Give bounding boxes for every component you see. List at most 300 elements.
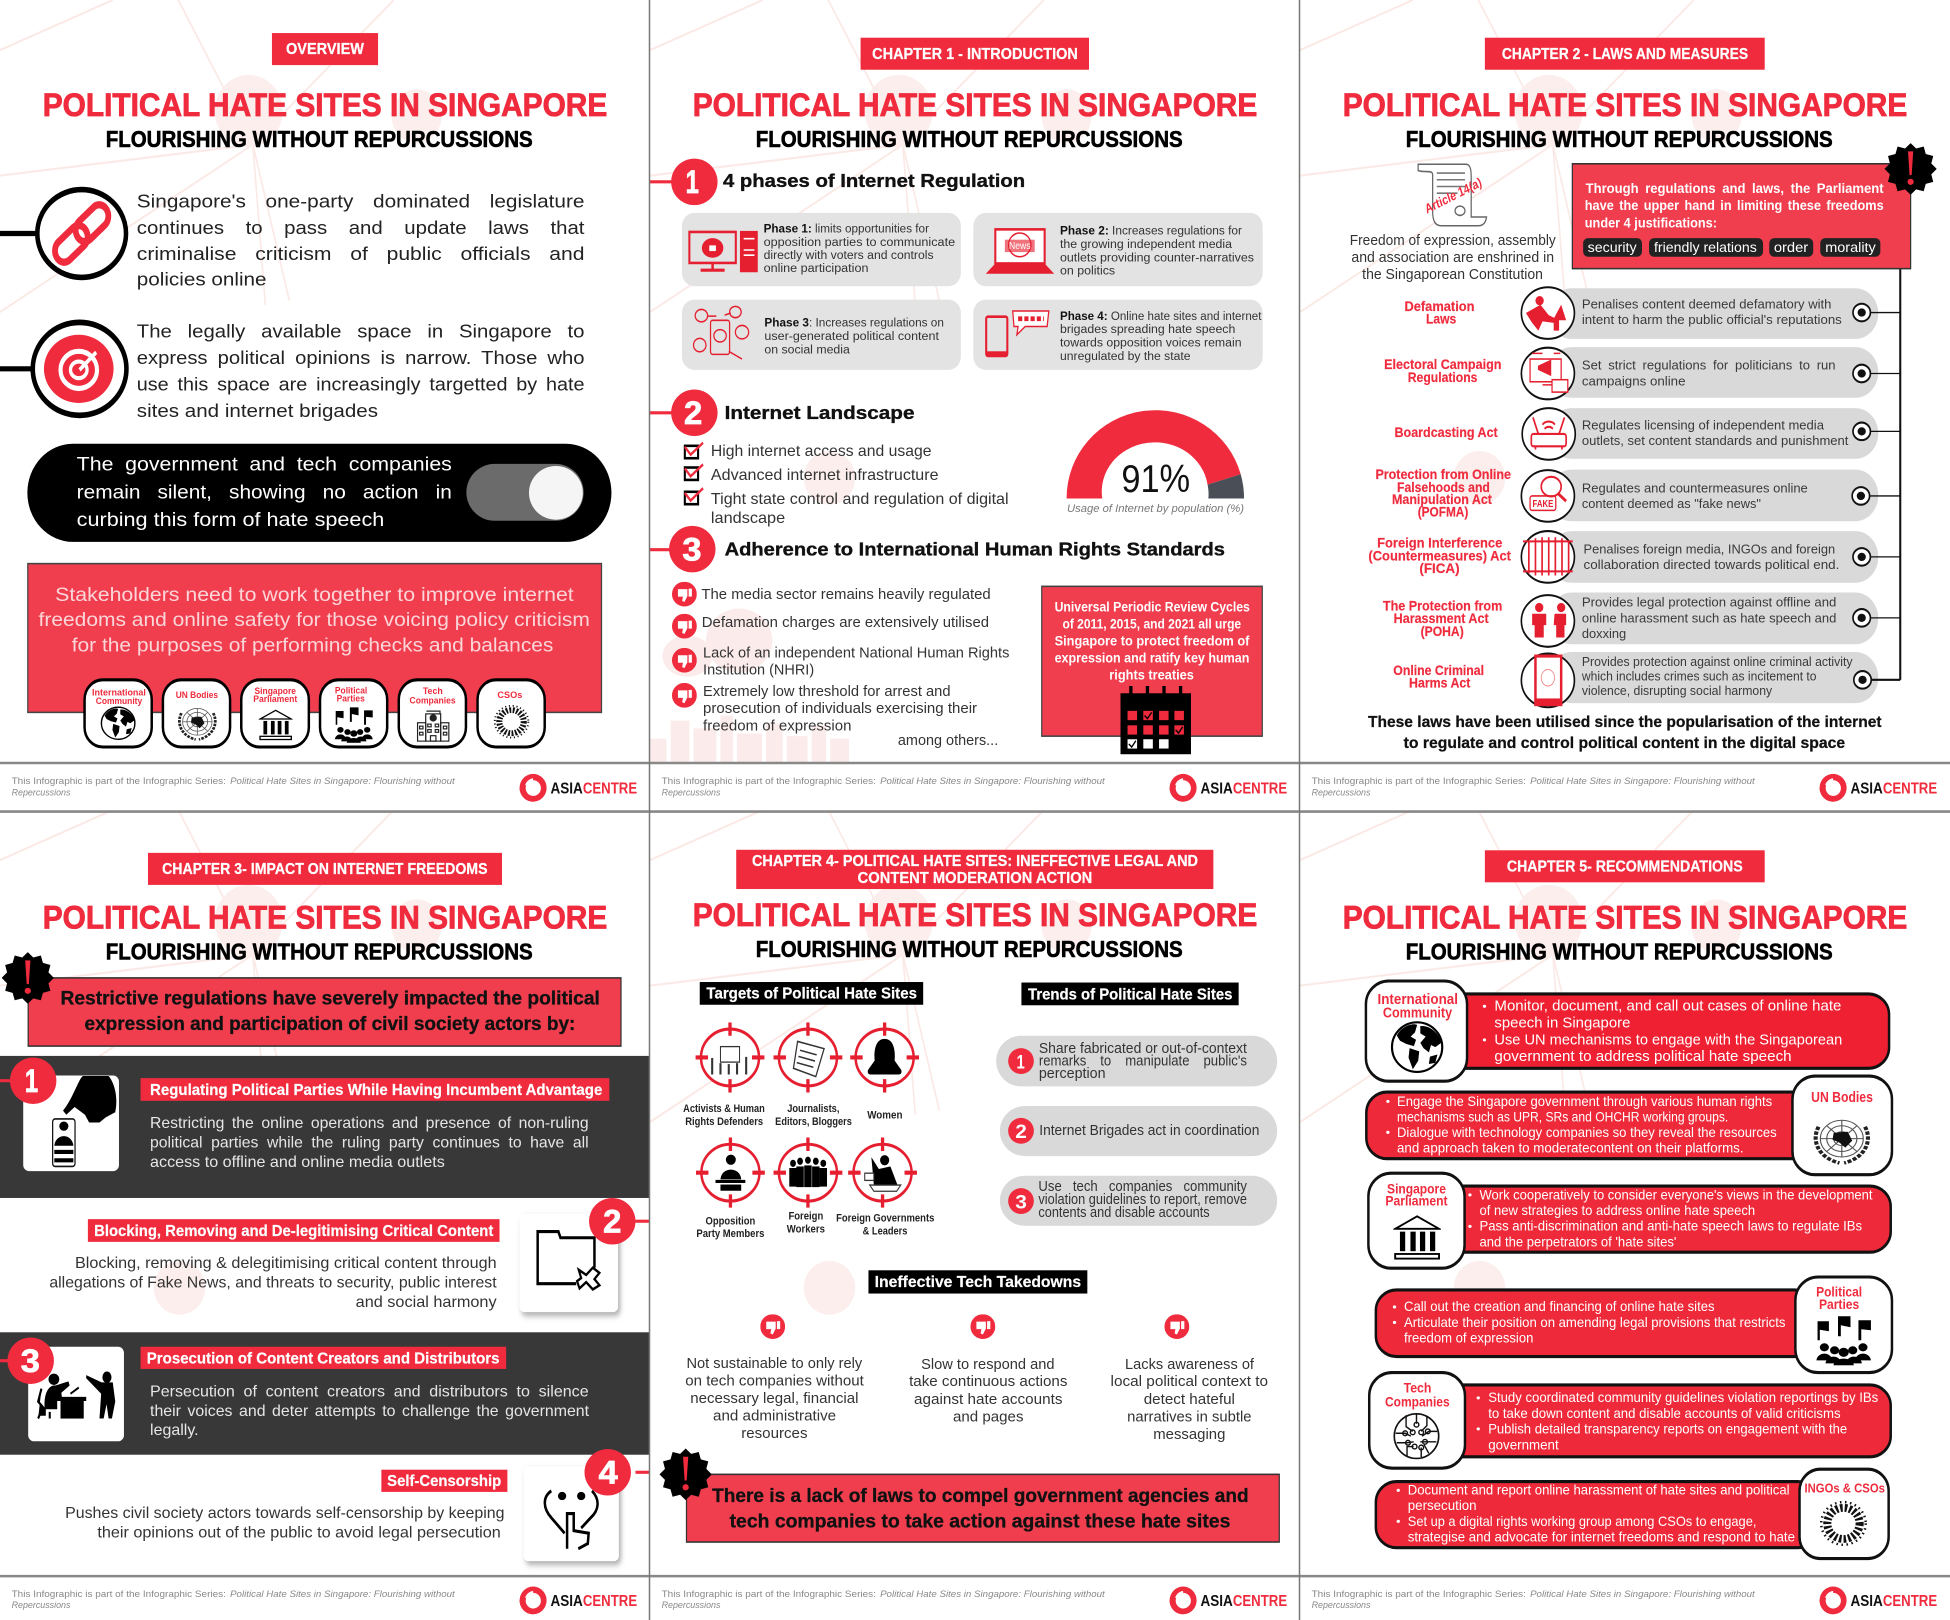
title: POLITICAL HATE SITES IN SINGAPORE	[43, 901, 607, 936]
phase 3 card: user-generated political content	[764, 330, 940, 343]
text block: legislature: continues to pass and update laws that	[137, 217, 585, 238]
footer: Repercussions	[1312, 1600, 1370, 1610]
callout: silent pill with toggle: curbing this form of hate speech	[77, 508, 384, 530]
item 3: prosecution: their voices and deter attempts to challenge the government	[150, 1402, 589, 1419]
recommendation: INGOs and CSOs: INGOs & CSOs	[1804, 1481, 1885, 1496]
callout: silent pill with toggle: The government and tech companies	[77, 453, 452, 475]
item 3: prosecution: 3	[21, 1344, 40, 1380]
recommendation: INGOs and CSOs: persecution	[1408, 1498, 1477, 1513]
title: POLITICAL HATE SITES IN SINGAPORE	[693, 899, 1257, 934]
human rights list: among others...	[898, 732, 998, 748]
internet landscape checklist: Tight state control and regulation of digital	[711, 490, 1009, 508]
trend 1: Share fabricated or out-of-context	[1039, 1040, 1247, 1056]
human rights list: prosecution of individuals exercising their	[703, 700, 978, 716]
law row: online criminal harms: violence, disrupting social harmony	[1582, 684, 1772, 698]
footer: Political Hate Sites in Singapore: Flourishing without	[1530, 776, 1756, 786]
law row: FICA: (FICA)	[1419, 561, 1460, 576]
footer: CENTRE	[1883, 1592, 1937, 1609]
closing statement: to regulate and control political content in the digital space	[1404, 735, 1845, 752]
takedown column 3: messaging	[1153, 1426, 1225, 1443]
item 1: regulating political parties: political parties while the ruling party continues to have all	[150, 1133, 589, 1151]
icon: target	[0, 322, 126, 415]
target: opposition party members: Opposition	[706, 1215, 755, 1228]
footer	[1300, 763, 1950, 802]
section 2 heading	[650, 390, 914, 436]
text block: available space	[137, 321, 585, 421]
target: foreign governments: Foreign Governments	[836, 1213, 935, 1225]
stakeholder: Singapore parliament	[241, 680, 309, 747]
footer: This Infographic is part of the Infographic Series:	[12, 776, 226, 786]
callout: lack of laws: There is a lack of laws to compel government agencies and	[712, 1485, 1249, 1507]
footer: Repercussions	[12, 1600, 70, 1610]
recommendation: Singapore parliament: Singapore	[1387, 1181, 1446, 1197]
human rights list: Extremely low threshold for arrest and	[703, 683, 951, 699]
law row: electoral campaign: Set strict regulations for politicians to run	[1582, 358, 1836, 373]
recommendation: Singapore parliament: Work cooperatively to consider everyone's views in the development	[1479, 1187, 1873, 1203]
recommendation: international community: International	[1378, 991, 1458, 1008]
recommendation: political parties: Political	[1816, 1285, 1862, 1300]
target: foreign workers: Workers	[787, 1224, 825, 1236]
callout: universal periodic review: Singapore to protect freedom of	[1055, 634, 1250, 649]
recommendation: international community: Community	[1383, 1004, 1453, 1021]
callout: lack of laws	[686, 1474, 1279, 1542]
recommendation: tech companies: Study coordinated community guidelines violation reportings by IBs	[1488, 1390, 1878, 1405]
recommendation: international community: speech in Singapore	[1494, 1014, 1630, 1031]
phase 4 card: unregulated by the state	[1060, 350, 1191, 363]
callout: universal periodic review: of 2011, 2015, and 2021 all urge	[1062, 617, 1241, 632]
chapter tag: recommendations	[1485, 850, 1765, 882]
footer: Political Hate Sites in Singapore: Flourishing without	[880, 776, 1106, 786]
recommendation: Singapore parliament: Parliament	[1385, 1194, 1448, 1209]
chapter tag: recommendations: CHAPTER 5- RECOMMENDATIONS	[1507, 857, 1743, 875]
recommendation: tech companies: to take down content and disable accounts of valid criticisms	[1488, 1406, 1841, 1421]
stakeholder: tech companies: Companies	[410, 695, 456, 706]
law row: defamation: intent to harm the public official's reputations	[1582, 313, 1842, 327]
phase 2 card: Phase 2: Increases regulations for	[1060, 225, 1242, 238]
takedown column 3: local political context to	[1111, 1373, 1268, 1389]
takedown column 3: narratives in subtle	[1127, 1408, 1251, 1425]
panel: overview	[0, 0, 650, 802]
text block: constitution	[1350, 232, 1556, 282]
phase 3 card: Phase 3 : Increases regulations on	[764, 317, 944, 330]
phase 1 card: online participation	[764, 262, 868, 276]
internet landscape checklist: High internet access and usage	[711, 442, 932, 459]
callout: justifications: friendly relations	[1654, 240, 1757, 255]
item 3: prosecution: Persecution of content creators and distributors to silence	[150, 1382, 589, 1400]
item 3: prosecution: Prosecution of Content Creators and Distributors	[147, 1350, 500, 1368]
law row: FICA: (Countermeasures) Act	[1368, 548, 1511, 564]
subtitle: FLOURISHING WITHOUT REPURCUSSIONS	[1406, 127, 1833, 153]
heading: targets	[700, 982, 923, 1005]
takedown column 1	[685, 1314, 864, 1441]
footer: This Infographic is part of the Infographic Series:	[12, 1589, 226, 1599]
stakeholder: Singapore parliament: Singapore	[255, 685, 296, 696]
takedown column 1: on tech companies without	[685, 1372, 864, 1389]
law row: FICA	[1368, 531, 1900, 583]
trend 3	[1000, 1176, 1277, 1226]
trend 3: contents and disable accounts	[1038, 1204, 1210, 1220]
item 4: self-censorship: their opinions out of the public to avoid legal persecution	[97, 1523, 501, 1541]
subtitle: FLOURISHING WITHOUT REPURCUSSIONS	[756, 127, 1183, 153]
law row: broadcasting act: Regulates licensing of independent media	[1582, 418, 1825, 433]
law row: POFMA: Regulates and countermeasures online	[1582, 481, 1808, 496]
law row: broadcasting act: outlets, set content standards and punishment	[1582, 434, 1849, 448]
text block: constitution: and association are enshrined in	[1351, 249, 1554, 265]
title: POLITICAL HATE SITES IN SINGAPORE	[1343, 901, 1907, 936]
heading: trends: Trends of Political Hate Sites	[1028, 986, 1232, 1004]
text block: constitution: the Singaporean Constitution	[1362, 266, 1543, 282]
heading: trends	[1021, 983, 1239, 1005]
footer: ASIA	[551, 1592, 583, 1609]
title: POLITICAL HATE SITES IN SINGAPORE	[1343, 89, 1907, 124]
footer: CENTRE	[583, 779, 637, 797]
human rights list: The media sector remains heavily regulated	[701, 586, 991, 603]
item 1: regulating political parties: 1	[25, 1064, 38, 1100]
law row: POFMA: Falsehoods and	[1397, 480, 1490, 495]
law row: electoral campaign	[1384, 347, 1900, 399]
chapter tag: ineffective action: CHAPTER 4- POLITICAL HATE SITES: INEFFECTIVE LEGAL AND	[752, 851, 1198, 869]
subtitle: FLOURISHING WITHOUT REPURCUSSIONS	[106, 127, 533, 153]
phase 4 card: Phase 4: Online hate sites and internet	[1060, 310, 1262, 323]
stakeholder: tech companies: Tech	[423, 685, 443, 696]
gauge chart: internet usage 91%	[1067, 410, 1244, 515]
section 3 heading	[650, 526, 1225, 572]
callout: silent pill with toggle	[27, 444, 611, 542]
item 2: blocking content: allegations of Fake News, and threats to security, public interest	[49, 1273, 497, 1291]
internet landscape checklist	[685, 442, 1009, 526]
target: opposition party members	[696, 1138, 765, 1241]
target: foreign governments: & Leaders	[863, 1226, 908, 1238]
section 2 heading: 2	[684, 397, 702, 432]
panel dividers	[650, 0, 1300, 1620]
gauge chart: internet usage 91%: 91%	[1121, 457, 1190, 501]
subtitle: FLOURISHING WITHOUT REPURCUSSIONS	[756, 937, 1183, 963]
callout: universal periodic review: expression and ratify key human	[1055, 650, 1249, 666]
callout: restrictive regulations	[28, 978, 621, 1046]
recommendation: tech companies: government	[1488, 1437, 1559, 1453]
takedown column 2: against hate accounts	[914, 1391, 1063, 1407]
stakeholder: international community: Community	[96, 695, 142, 706]
trend 3: Use tech companies community	[1038, 1178, 1247, 1195]
takedown column 3: detect hateful	[1144, 1391, 1235, 1407]
stakeholder: CSOs	[478, 680, 545, 747]
footer	[0, 1576, 650, 1614]
gauge chart: internet usage 91%: Usage of Internet by population (%)	[1067, 503, 1244, 515]
human rights list	[672, 582, 1010, 748]
footer: CENTRE	[1233, 779, 1287, 797]
stakeholder: UN bodies	[163, 680, 230, 747]
stakeholder: CSOs: CSOs	[497, 689, 523, 700]
section 1 heading: 1	[686, 166, 699, 201]
chapter tag: laws and measures: CHAPTER 2 - LAWS AND MEASURES	[1502, 45, 1748, 62]
takedown column 1: Not sustainable to only rely	[686, 1355, 863, 1371]
title: POLITICAL HATE SITES IN SINGAPORE	[43, 89, 607, 124]
recommendation: international community: Use UN mechanisms to engage with the Singaporean	[1494, 1031, 1842, 1048]
trend 3: 3	[1015, 1191, 1027, 1213]
item 1: regulating political parties: access to offline and online media outlets	[150, 1153, 445, 1170]
chapter tag: introduction: CHAPTER 1 - INTRODUCTION	[872, 45, 1078, 62]
footer: CENTRE	[583, 1592, 637, 1609]
callout: stakeholders: Stakeholders need to work together to improve internet	[55, 583, 574, 605]
target: foreign governments	[836, 1138, 935, 1238]
callout: justifications: under 4 justifications:	[1585, 215, 1717, 231]
chapter tag: overview: OVERVIEW	[286, 40, 365, 58]
trend 1: perception	[1039, 1065, 1106, 1081]
stakeholder: international community	[85, 680, 152, 747]
item 1: regulating political parties: Regulating Political Parties While Having Incumbent Advantage	[150, 1082, 602, 1100]
text block: available space: use this space are increasingly targetted by hate	[137, 374, 585, 395]
recommendation: political parties: Call out the creation and financing of online hate sites	[1404, 1299, 1715, 1314]
phase 3 card: on social media	[764, 343, 851, 357]
law row: POHA	[1383, 593, 1900, 647]
callout: silent pill with toggle: remain silent, showing no action in	[77, 481, 452, 503]
law row: online criminal harms: Online Criminal	[1393, 663, 1484, 679]
internet landscape checklist: Advanced internet infrastructure	[711, 466, 939, 483]
recommendation: Singapore parliament	[1368, 1173, 1891, 1268]
phase 1 card: Phase 1: limits opportunities for	[764, 223, 929, 236]
internet landscape checklist: landscape	[711, 508, 785, 526]
law row: POFMA: Protection from Online	[1375, 467, 1511, 482]
section 3 heading: Adherence to International Human Rights Standards	[725, 539, 1225, 560]
target: journalists: Editors, Bloggers	[775, 1116, 852, 1128]
text block: available space: The legally available space in Singapore to	[137, 321, 585, 342]
phase 2 card: News	[1009, 240, 1031, 251]
law row: online criminal harms: Harms Act	[1409, 675, 1470, 691]
panel: chapter 5 recommendations	[1300, 810, 1950, 1614]
section 1 heading	[650, 159, 1025, 205]
callout: stakeholders	[28, 564, 601, 712]
target: women	[850, 1022, 919, 1122]
takedown column 1: necessary legal, financial	[690, 1390, 859, 1406]
callout: restrictive regulations: expression and participation of civil society actors by:	[85, 1012, 575, 1034]
icon: article 14(a) scroll: Article 14(a)	[1423, 174, 1483, 217]
callout: stakeholders: freedoms and online safety for those voicing policy criticism	[39, 608, 590, 631]
recommendation: political parties: freedom of expression	[1404, 1330, 1533, 1346]
takedown column 1: resources	[741, 1425, 808, 1441]
footer: Political Hate Sites in Singapore: Flourishing without	[230, 776, 456, 786]
section 1 heading: 4 phases of Internet Regulation	[723, 170, 1025, 191]
item 2: blocking content: Blocking, Removing and De-legitimising Critical Content	[94, 1223, 493, 1241]
recommendation: UN bodies: Engage the Singapore government through various human rights	[1397, 1094, 1772, 1109]
callout: justifications	[1572, 164, 1911, 269]
footer: This Infographic is part of the Infographic Series:	[1312, 776, 1526, 786]
recommendation: tech companies: Companies	[1385, 1395, 1450, 1410]
law row: POHA: online harassment such as hate speech and	[1582, 611, 1836, 626]
target: activists	[683, 1022, 765, 1128]
law row: POFMA: FAKE	[1533, 498, 1553, 509]
text block: legislature: criminalise criticism of public officials and	[137, 243, 585, 264]
footer: ASIA	[551, 779, 583, 797]
recommendation: INGOs and CSOs	[1376, 1469, 1889, 1559]
callout: universal periodic review: rights treaties	[1109, 667, 1194, 683]
law row: POHA: Provides legal protection against offline and	[1582, 595, 1836, 610]
callout: justifications: have the upper hand in limiting these freedoms	[1585, 198, 1884, 214]
icon: calendar	[1121, 686, 1191, 754]
target: foreign workers: Foreign	[788, 1211, 823, 1223]
takedown column 3	[1111, 1314, 1268, 1443]
footer: CENTRE	[1883, 779, 1937, 797]
law row: POHA: The Protection from	[1383, 598, 1502, 614]
chapter tag: impact	[148, 853, 502, 885]
phase 2 card: outlets providing counter-narratives	[1060, 251, 1254, 265]
law row: FICA: Penalises foreign media, INGOs and foreign	[1584, 542, 1835, 557]
recommendation: Singapore parliament: Pass anti-discrimination and anti-hate speech laws to regulate IBs	[1479, 1218, 1862, 1234]
item 3: prosecution: legally.	[150, 1421, 199, 1438]
target: journalists: Journalists,	[787, 1103, 840, 1116]
law row: online criminal harms	[1393, 652, 1900, 707]
footer: ASIA	[1201, 779, 1233, 797]
human rights list: Institution (NHRI)	[703, 661, 814, 678]
icon: chain link	[0, 190, 126, 277]
footer: This Infographic is part of the Infographic Series:	[662, 776, 876, 786]
phase 2 card: on politics	[1060, 264, 1116, 278]
law row: POFMA: content deemed as "fake news"	[1582, 497, 1761, 511]
footer: Repercussions	[1312, 788, 1370, 798]
heading: ineffective takedowns	[868, 1270, 1087, 1294]
footer: Political Hate Sites in Singapore: Flourishing without	[1530, 1589, 1756, 1599]
phase 1 card: directly with voters and controls	[764, 249, 934, 262]
chapter tag: impact: CHAPTER 3- IMPACT ON INTERNET FREEDOMS	[162, 860, 487, 877]
target: opposition party members: Party Members	[696, 1228, 765, 1241]
human rights list: Defamation charges are extensively utilised	[702, 614, 989, 630]
icon: article 14(a) scroll	[1418, 164, 1487, 226]
trend 1: remarks to manipulate public's	[1039, 1052, 1247, 1069]
footer: ASIA	[1851, 1592, 1883, 1609]
law row: broadcasting act: Boardcasting Act	[1395, 425, 1498, 440]
human rights list: freedom of expression	[703, 717, 851, 734]
recommendation: UN bodies: UN Bodies	[1811, 1089, 1873, 1105]
footer	[0, 763, 650, 802]
recommendation: international community: Monitor, document, and call out cases of online hate	[1494, 997, 1841, 1014]
heading: targets: Targets of Political Hate Sites	[706, 985, 917, 1003]
footer: This Infographic is part of the Infographic Series:	[662, 1589, 876, 1599]
stakeholder: political parties: Parties	[337, 693, 365, 704]
law row: electoral campaign: Regulations	[1408, 370, 1478, 385]
law row: FICA: Foreign Interference	[1377, 535, 1503, 551]
decorative city and 5G backdrop	[650, 609, 849, 762]
footer: Repercussions	[12, 788, 70, 798]
phase 4 card: towards opposition voices remain	[1060, 337, 1242, 350]
recommendation: political parties: Parties	[1819, 1297, 1859, 1312]
text block: legislature: Singapore's one-party dominated legislature	[137, 191, 585, 212]
item 2: blocking content: Blocking, removing & delegitimising critical content through	[75, 1254, 497, 1272]
callout: universal periodic review: Universal Periodic Review Cycles	[1055, 600, 1250, 615]
subtitle: FLOURISHING WITHOUT REPURCUSSIONS	[106, 939, 533, 965]
footer: CENTRE	[1233, 1592, 1287, 1609]
footer: ASIA	[1201, 1592, 1233, 1609]
target: women: Women	[867, 1110, 902, 1122]
panel: chapter 2 laws and measures	[1300, 0, 1950, 802]
recommendation: political parties: Articulate their position on amending legal provisions that restricts	[1404, 1315, 1785, 1330]
chapter tag: ineffective action	[736, 850, 1213, 889]
text block: legislature: policies online	[137, 269, 267, 290]
law row: online criminal harms: Provides protection against online criminal activity	[1582, 655, 1853, 669]
stakeholder: international community: International	[92, 687, 146, 698]
law row: POFMA: Manipulation Act	[1392, 492, 1492, 508]
takedown column 1: and administrative	[713, 1407, 836, 1424]
target: activists: Activists & Human	[683, 1103, 765, 1116]
panel: chapter 3 impact on internet freedoms	[0, 810, 650, 1614]
trend 3: violation guidelines to report, remove	[1038, 1191, 1247, 1207]
closing statement: These laws have been utilised since the popularisation of the internet	[1368, 714, 1882, 731]
takedown column 2	[909, 1314, 1068, 1425]
item 4: self-censorship: Pushes civil society actors towards self-censorship by keeping	[65, 1504, 504, 1522]
heading: ineffective takedowns: Ineffective Tech Takedowns	[875, 1274, 1081, 1291]
callout: justifications: Through regulations and laws, the Parliament	[1586, 181, 1884, 197]
chapter tag: laws and measures	[1485, 38, 1765, 70]
target: journalists	[774, 1022, 852, 1128]
trend 2: Internet Brigades act in coordination	[1039, 1122, 1259, 1138]
takedown column 2: and pages	[953, 1408, 1024, 1425]
phase 2 card	[973, 213, 1263, 286]
stakeholder: UN bodies: UN Bodies	[176, 689, 218, 700]
phase 2 card: the growing independent media	[1060, 238, 1233, 251]
item 4: self-censorship	[65, 1449, 650, 1565]
footer	[650, 1576, 1300, 1614]
recommendation: tech companies: Publish detailed transparency reports on engagement with the	[1488, 1421, 1847, 1437]
item 4: self-censorship: 4	[599, 1456, 618, 1491]
law row: POHA: Harassment Act	[1394, 611, 1489, 626]
recommendation: Singapore parliament: of new strategies to address online hate speech	[1479, 1203, 1755, 1218]
human rights list: Lack of an independent National Human Rights	[703, 644, 1010, 661]
footer: ASIA	[1851, 779, 1883, 797]
target: activists: Rights Defenders	[685, 1116, 764, 1128]
law row: broadcasting act	[1395, 408, 1900, 460]
closing statement	[1368, 714, 1882, 752]
callout: stakeholders: for the purposes of performing checks and balances	[72, 634, 554, 656]
law row: online criminal harms: which includes crimes such as incitement to	[1581, 669, 1817, 684]
recommendation: Singapore parliament: and the perpetrators of 'hate sites'	[1479, 1234, 1676, 1250]
recommendation: political parties	[1376, 1277, 1892, 1373]
stakeholder: political parties	[320, 680, 387, 747]
phase 3 card	[682, 300, 961, 370]
recommendation: international community: government to address political hate speech	[1494, 1048, 1792, 1064]
callout: restrictive regulations: Restrictive regulations have severely impacted the political	[61, 987, 600, 1009]
chapter tag: introduction	[861, 38, 1089, 70]
text block: legislature	[137, 191, 585, 290]
takedown column 2: Slow to respond and	[921, 1356, 1055, 1372]
stakeholder: tech companies	[399, 680, 466, 747]
recommendation: UN bodies: and approach taken to moderatecontent on their platforms.	[1397, 1140, 1744, 1156]
phase 1 card: opposition parties to communicate	[764, 236, 955, 249]
panel: chapter 4 ineffective action	[650, 810, 1300, 1614]
trend 1: 1	[1016, 1051, 1025, 1073]
footer: Political Hate Sites in Singapore: Flourishing without	[880, 1589, 1106, 1599]
item 1: regulating political parties	[0, 1056, 650, 1198]
title: POLITICAL HATE SITES IN SINGAPORE	[693, 89, 1257, 124]
law row: defamation: Penalises content deemed defamatory with	[1582, 297, 1831, 312]
target: foreign workers	[774, 1138, 842, 1236]
footer: Political Hate Sites in Singapore: Flourishing without	[230, 1589, 456, 1599]
section 3 heading: 3	[682, 533, 701, 568]
text block: available space: sites and internet brigades	[137, 400, 378, 421]
recommendation: INGOs and CSOs: strategise and advocate for internet freedoms and respond to hate	[1408, 1529, 1795, 1545]
law row: FICA: collaboration directed towards political end.	[1584, 558, 1839, 572]
recommendation: tech companies	[1369, 1373, 1891, 1468]
footer	[650, 763, 1300, 802]
section 2 heading: Internet Landscape	[725, 402, 914, 423]
icon: alert burst	[1885, 143, 1937, 195]
law row: electoral campaign: campaigns online	[1582, 374, 1686, 389]
law row: defamation: Laws	[1426, 311, 1457, 327]
item 2: blocking content	[49, 1198, 650, 1316]
law row: defamation: Defamation	[1404, 299, 1475, 314]
chapter tag: ineffective action: CONTENT MODERATION ACTION	[858, 869, 1092, 886]
callout: lack of laws: tech companies to take action against these hate sites	[730, 1510, 1230, 1532]
recommendation: UN bodies	[1366, 1076, 1892, 1175]
item 1: regulating political parties: Restricting the online operations and presence of non-ruling	[150, 1114, 589, 1132]
takedown column 3: Lacks awareness of	[1125, 1356, 1254, 1372]
